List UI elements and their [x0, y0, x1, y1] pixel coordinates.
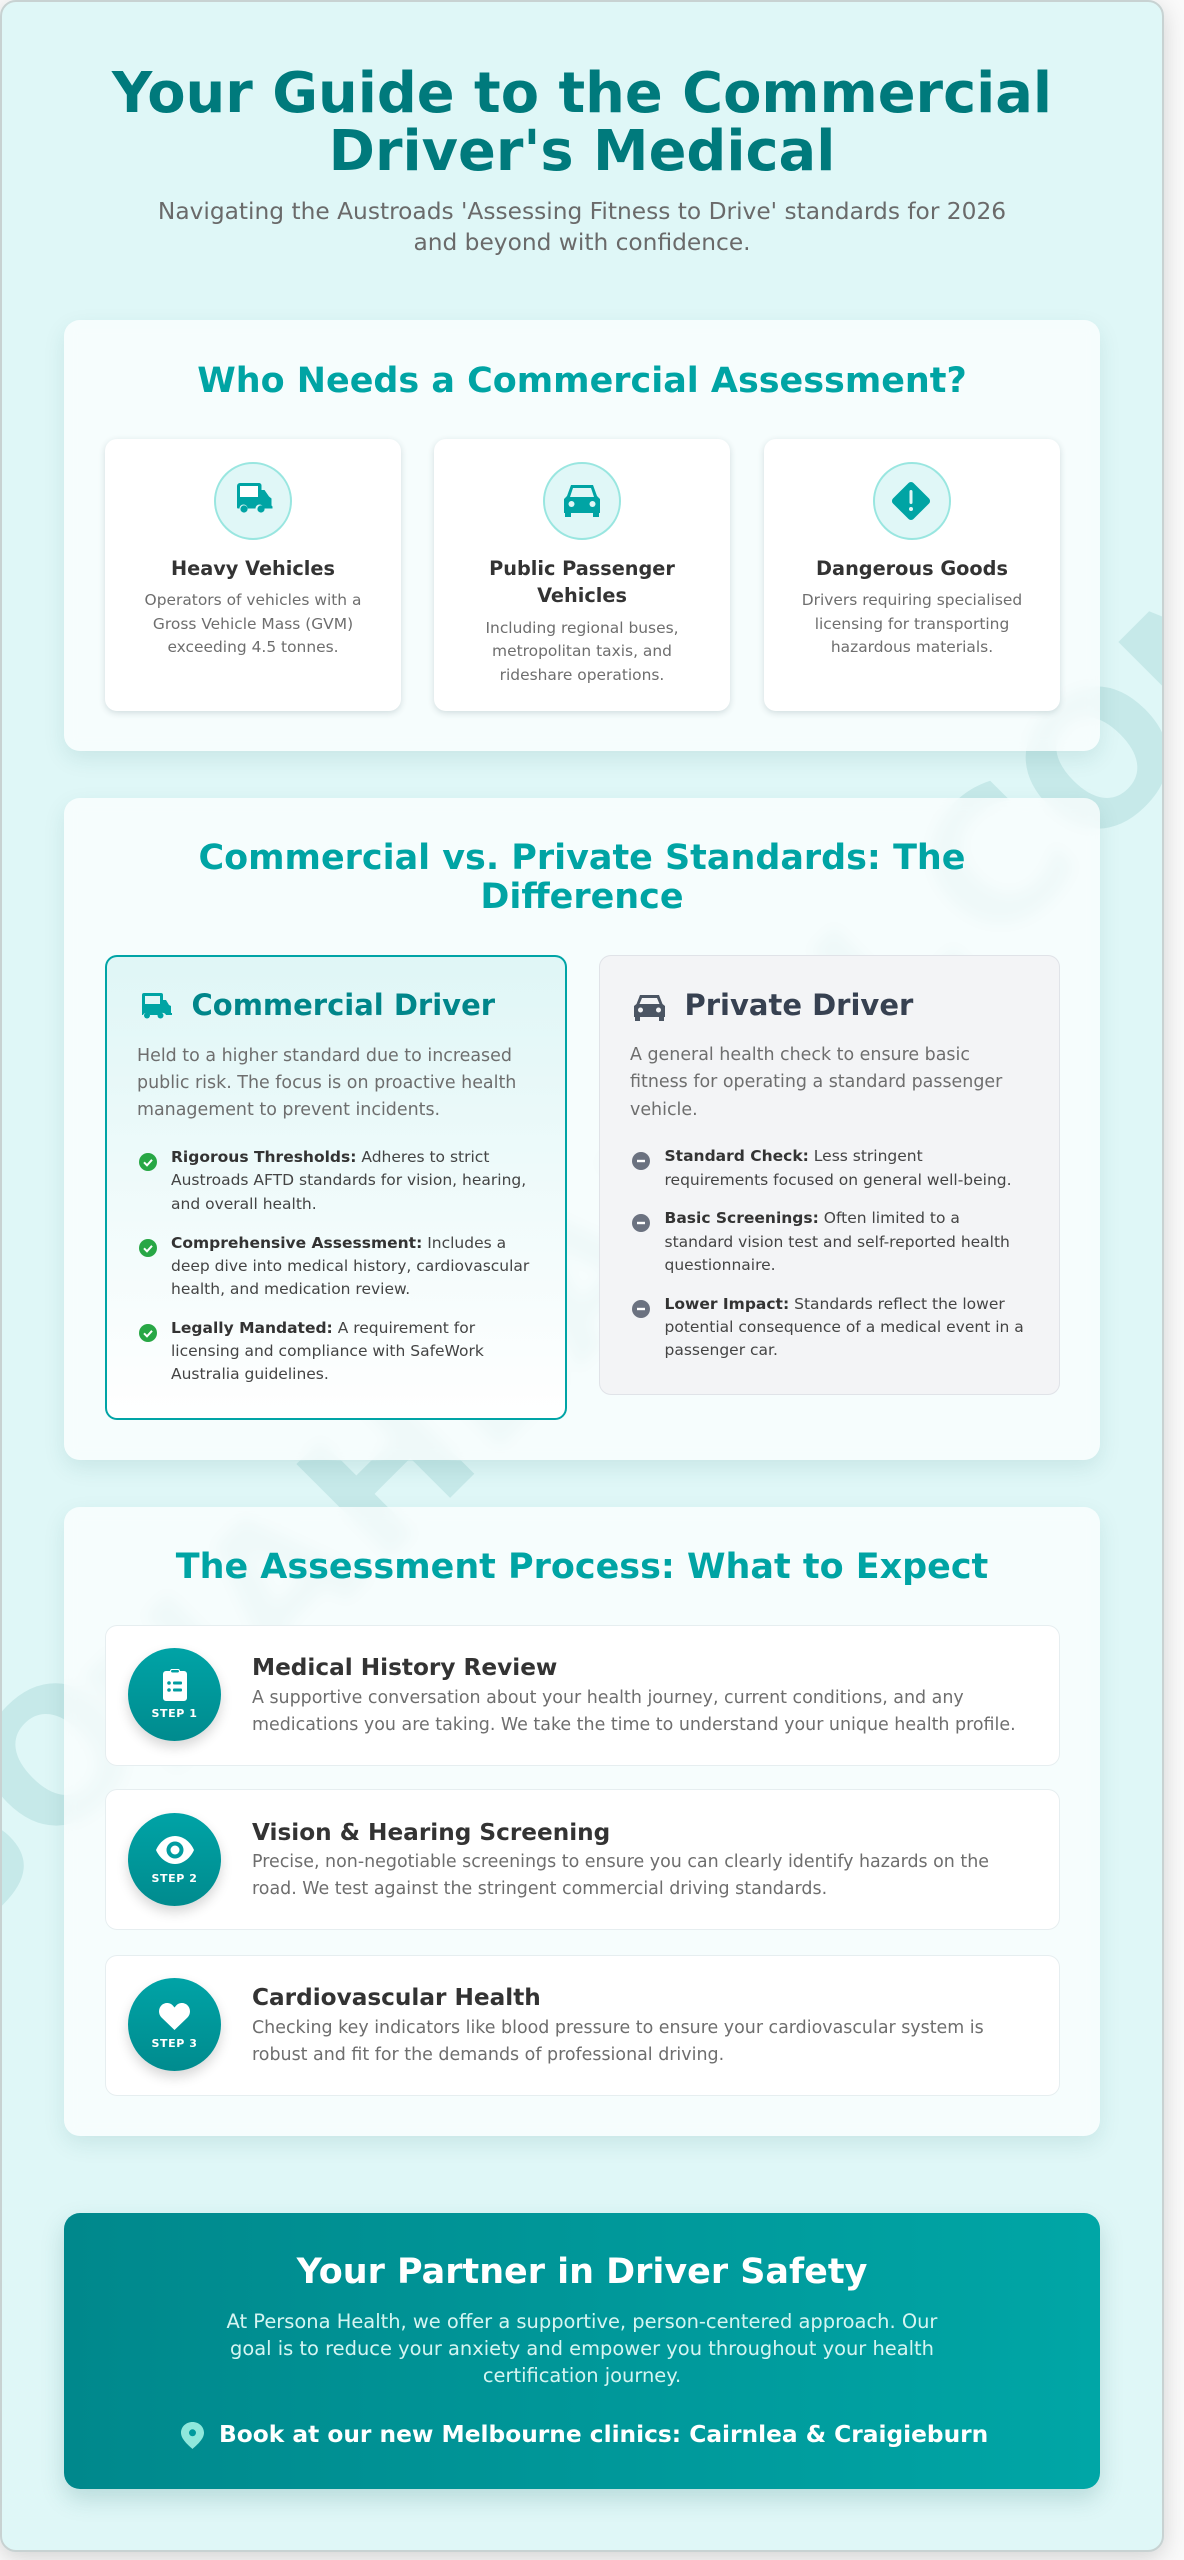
text: basic screenings: questionnaire.: [664, 1256, 776, 1274]
step 3: [105, 1955, 1060, 2096]
subtitle: [158, 198, 1006, 256]
text: basic screenings: Basic Screenings: Often limited to a: [664, 1209, 960, 1227]
text: heavy vehicles description: Gross Vehicle Mass (GVM): [153, 615, 353, 633]
text: lower impact: potential consequence of a medical event in a: [664, 1318, 1024, 1336]
title: Your Guide to the Commercial: [112, 61, 1052, 126]
heading: assessment process: The Assessment Process: What to Expect: [176, 1546, 988, 1586]
step text: vision and hearing: [252, 1852, 989, 1899]
title: Driver's Medical: [329, 119, 835, 184]
text: comprehensive assessment: Comprehensive Assessment: Includes a: [171, 1234, 506, 1252]
heading: your partner: Your Partner in Driver Safety: [297, 2252, 867, 2292]
step title: cardiovascular health: Cardiovascular Health: [252, 1984, 541, 2011]
text: public passenger description: Including regional buses,: [485, 618, 679, 636]
heading: commercial driver: Commercial Driver: [192, 988, 495, 1022]
label: step 3: STEP 3: [151, 2037, 198, 2050]
step text: medical history: A supportive conversation about your health journey, current conditions, and any: [252, 1688, 964, 1708]
icon: truck: [214, 462, 292, 540]
icon: heart: [159, 2003, 190, 2030]
step text: cardiovascular health: Checking key indicators like blood pressure to ensure your cardiovascular system is: [252, 2018, 984, 2038]
panel: assessment process: [64, 1506, 1100, 2136]
text: basic screenings: [664, 1209, 1010, 1274]
text: rigorous thresholds: and overall health.: [171, 1195, 317, 1213]
badge: step 1: [128, 1648, 221, 1741]
text: partner description: [226, 2310, 938, 2387]
text: commercial summary: Held to a higher standard due to increased: [137, 1046, 512, 1066]
card: dangerous goods: [764, 439, 1060, 711]
label: heavy vehicles: Heavy Vehicles: [171, 557, 335, 580]
list item: lower impact: [632, 1295, 1024, 1359]
step title: vision and hearing: Vision & Hearing Screening: [252, 1819, 610, 1846]
text: legally mandated: Australia guidelines.: [171, 1365, 329, 1383]
text: partner description: certification journey.: [483, 2364, 681, 2387]
text: heavy vehicles description: [145, 591, 361, 656]
list item: standard check: [632, 1147, 1012, 1189]
text: commercial summary: [137, 1046, 516, 1120]
icon: minus: [632, 1152, 650, 1170]
subtitle: and beyond with confidence.: [413, 229, 751, 256]
text: comprehensive assessment: deep dive into medical history, cardiovascular: [171, 1257, 529, 1275]
text: dangerous goods description: [802, 591, 1022, 656]
label: public passenger vehicles: [489, 557, 675, 607]
list item: legally mandated: [139, 1319, 484, 1383]
text: standard check: requirements focused on general well-being.: [664, 1171, 1012, 1189]
title: [111, 61, 1052, 184]
text: standard check: Standard Check: Less stringent: [664, 1147, 923, 1165]
text: private summary: A general health check to ensure basic: [630, 1045, 970, 1065]
text: lower impact: [664, 1295, 1024, 1359]
step text: cardiovascular health: [252, 2018, 984, 2065]
text: dangerous goods description: Drivers requiring specialised: [802, 591, 1022, 609]
heading: private driver: Private Driver: [684, 988, 913, 1022]
icon: eye: [156, 1836, 194, 1864]
text: rigorous thresholds: Rigorous Thresholds: Adheres to strict: [171, 1148, 489, 1166]
text: private summary: [630, 1045, 1002, 1120]
heading: comparison: [198, 838, 965, 916]
badge: step 2: [128, 1813, 221, 1906]
text: private summary: vehicle.: [630, 1100, 698, 1120]
text: rigorous thresholds: [171, 1148, 526, 1213]
text: lower impact: passenger car.: [664, 1341, 778, 1359]
text: commercial summary: public risk. The focus is on proactive health: [137, 1073, 516, 1093]
step text: vision and hearing: Precise, non-negotiable screenings to ensure you can clearly identify hazards on the: [252, 1852, 989, 1872]
heading: comparison: Commercial vs. Private Standards: The: [198, 838, 965, 878]
step text: cardiovascular health: robust and fit for the demands of professional driving.: [252, 2045, 724, 2065]
panel: commercial vs private: [64, 798, 1100, 1460]
text: dangerous goods description: hazardous materials.: [831, 638, 993, 656]
icon: commercial truck: [142, 993, 172, 1018]
card: heavy vehicles: [105, 439, 401, 711]
label: dangerous goods: Dangerous Goods: [816, 557, 1008, 580]
icon: location pin: [181, 2422, 204, 2449]
heading: comparison: Difference: [480, 876, 684, 916]
text: private summary: fitness for operating a standard passenger: [630, 1072, 1002, 1092]
step 1: [105, 1624, 1060, 1766]
label: step 1: STEP 1: [151, 1707, 198, 1720]
text: heavy vehicles description: exceeding 4.5 tonnes.: [167, 638, 339, 656]
text: legally mandated: licensing and compliance with SafeWork: [171, 1342, 484, 1360]
text: basic screenings: standard vision test and self-reported health: [664, 1233, 1010, 1251]
text: clinic call to action: Book at our new Melbourne clinics: Cairnlea & Craigieburn: [219, 2420, 988, 2448]
text: partner description: goal is to reduce your anxiety and empower you throughout your health: [230, 2337, 934, 2360]
icon: check: [139, 1239, 157, 1257]
label: public passenger vehicles: Public Passenger: [489, 557, 675, 580]
list item: comprehensive assessment: [139, 1234, 530, 1298]
panel: call to action footer: [64, 2213, 1100, 2489]
icon: check: [139, 1324, 157, 1342]
text: standard check: [664, 1147, 1012, 1189]
text: comprehensive assessment: health, and medication review.: [171, 1280, 410, 1298]
step text: vision and hearing: road. We test against the stringent commercial driving standards.: [252, 1879, 827, 1899]
column: commercial driver: [104, 954, 566, 1420]
text: partner description: At Persona Health, we offer a supportive, person-centered approach. Our: [227, 2310, 937, 2332]
step text: medical history: medications you are taking. We take the time to understand your unique health profile.: [252, 1714, 1016, 1734]
text: heavy vehicles description: Operators of vehicles with a: [145, 591, 361, 609]
heading: who needs: Who Needs a Commercial Assessment?: [197, 360, 967, 400]
text: legally mandated: [171, 1319, 484, 1383]
text: lower impact: Lower Impact: Standards reflect the lower: [664, 1295, 1005, 1313]
label: step 2: STEP 2: [151, 1872, 198, 1885]
icon: minus: [632, 1300, 650, 1318]
icon: car: [543, 462, 621, 540]
panel: who needs a commercial assessment: [64, 320, 1100, 751]
icon: check: [139, 1153, 157, 1171]
text: legally mandated: Legally Mandated: A requirement for: [171, 1319, 475, 1337]
text: commercial summary: management to prevent incidents.: [137, 1100, 440, 1120]
card: public passenger vehicles: [434, 439, 730, 711]
icon: minus: [632, 1214, 650, 1232]
text: comprehensive assessment: [171, 1234, 530, 1298]
list item: rigorous thresholds: [139, 1148, 526, 1213]
text: public passenger description: rideshare operations.: [500, 666, 664, 684]
step 2: [105, 1789, 1060, 1930]
list item: basic screenings: [632, 1209, 1010, 1274]
icon: private car: [634, 995, 665, 1021]
text: rigorous thresholds: Austroads AFTD standards for vision, hearing,: [171, 1171, 526, 1189]
icon: clipboard: [163, 1669, 187, 1701]
step text: medical history: [252, 1688, 1016, 1734]
icon: hazard diamond: [873, 462, 951, 540]
text: public passenger description: metropolitan taxis, and: [492, 642, 672, 660]
step title: medical history: Medical History Review: [252, 1654, 557, 1681]
text: public passenger description: [485, 618, 679, 684]
column: private driver: [598, 954, 1060, 1394]
subtitle: Navigating the Austroads 'Assessing Fitness to Drive' standards for 2026: [158, 198, 1006, 224]
badge: step 3: [128, 1978, 221, 2071]
text: dangerous goods description: licensing for transporting: [815, 615, 1009, 633]
label: public passenger vehicles: Vehicles: [537, 584, 627, 607]
watermark: diagonal brand text: NA: [46, 1456, 403, 1813]
